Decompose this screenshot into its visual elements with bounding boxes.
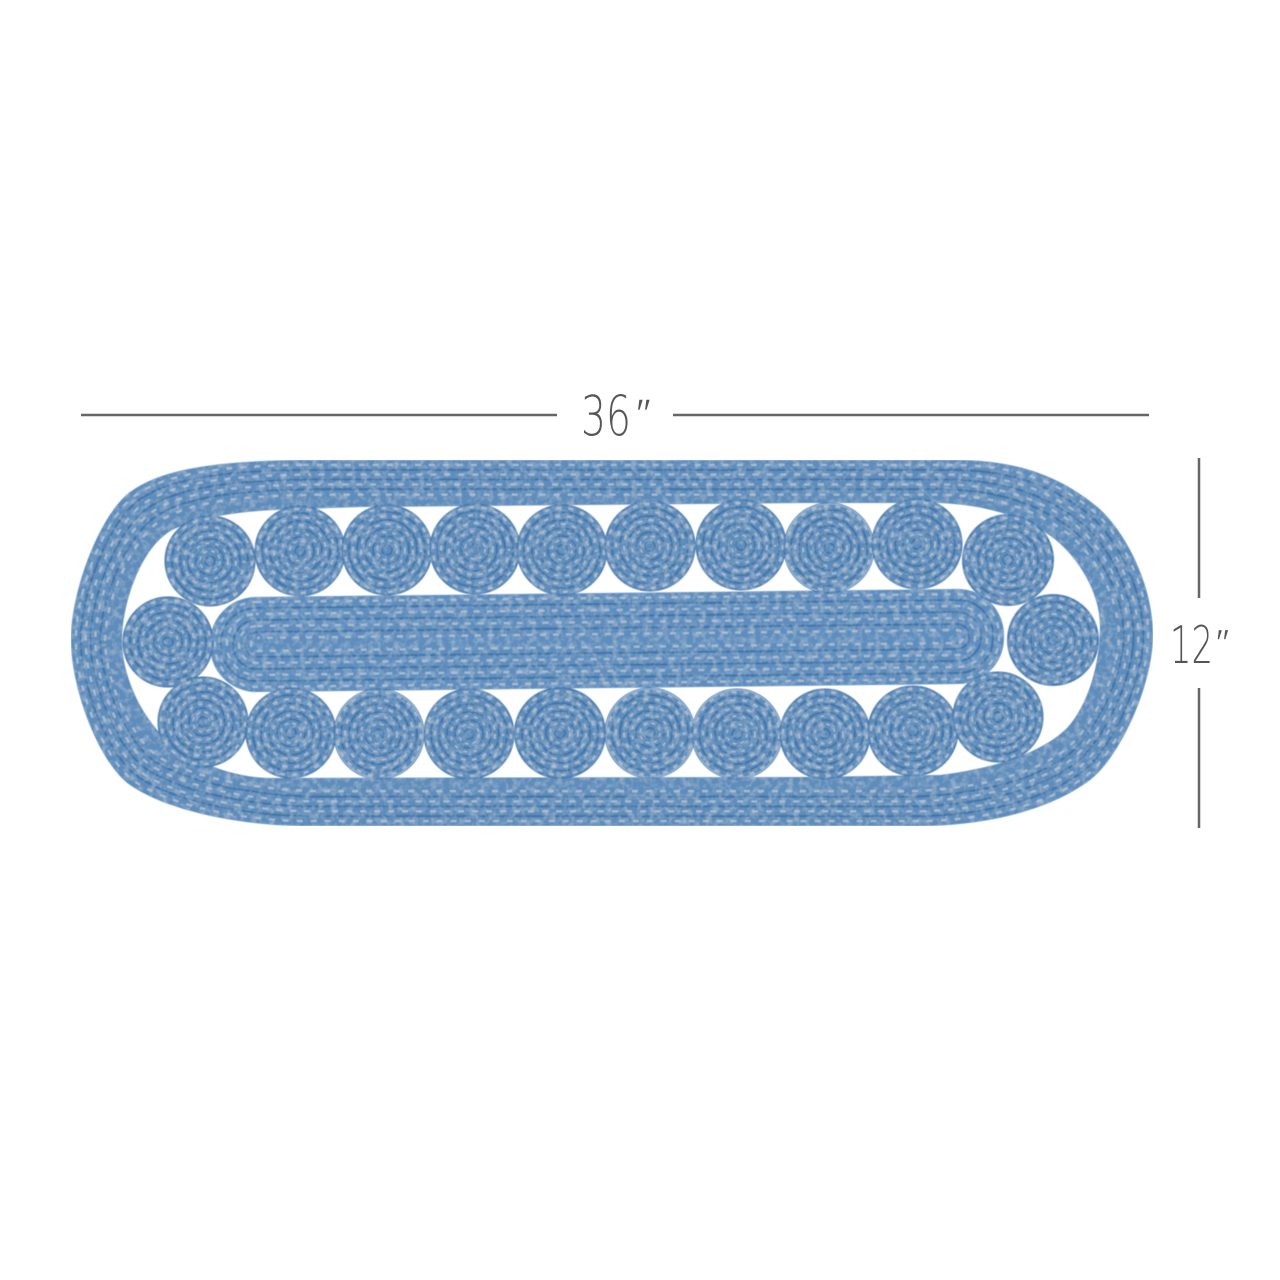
braided oval table runner <box>71 460 1153 826</box>
bottom row of coiled circles <box>158 672 1043 779</box>
middle end circles <box>122 594 1099 688</box>
top row of coiled circles <box>165 499 1054 606</box>
height dimension: 12 inches: ″ <box>1214 623 1229 665</box>
width dimension: 36 inches: ″ <box>634 390 651 437</box>
width dimension: 36 inches <box>81 384 1149 448</box>
height dimension: 12 inches: 12 <box>1170 616 1213 676</box>
central braided oval bar <box>209 588 1005 693</box>
width dimension: 36 inches: 36 <box>581 384 631 448</box>
height dimension: 12 inches <box>1170 458 1229 828</box>
outer braided ring <box>71 460 1153 826</box>
